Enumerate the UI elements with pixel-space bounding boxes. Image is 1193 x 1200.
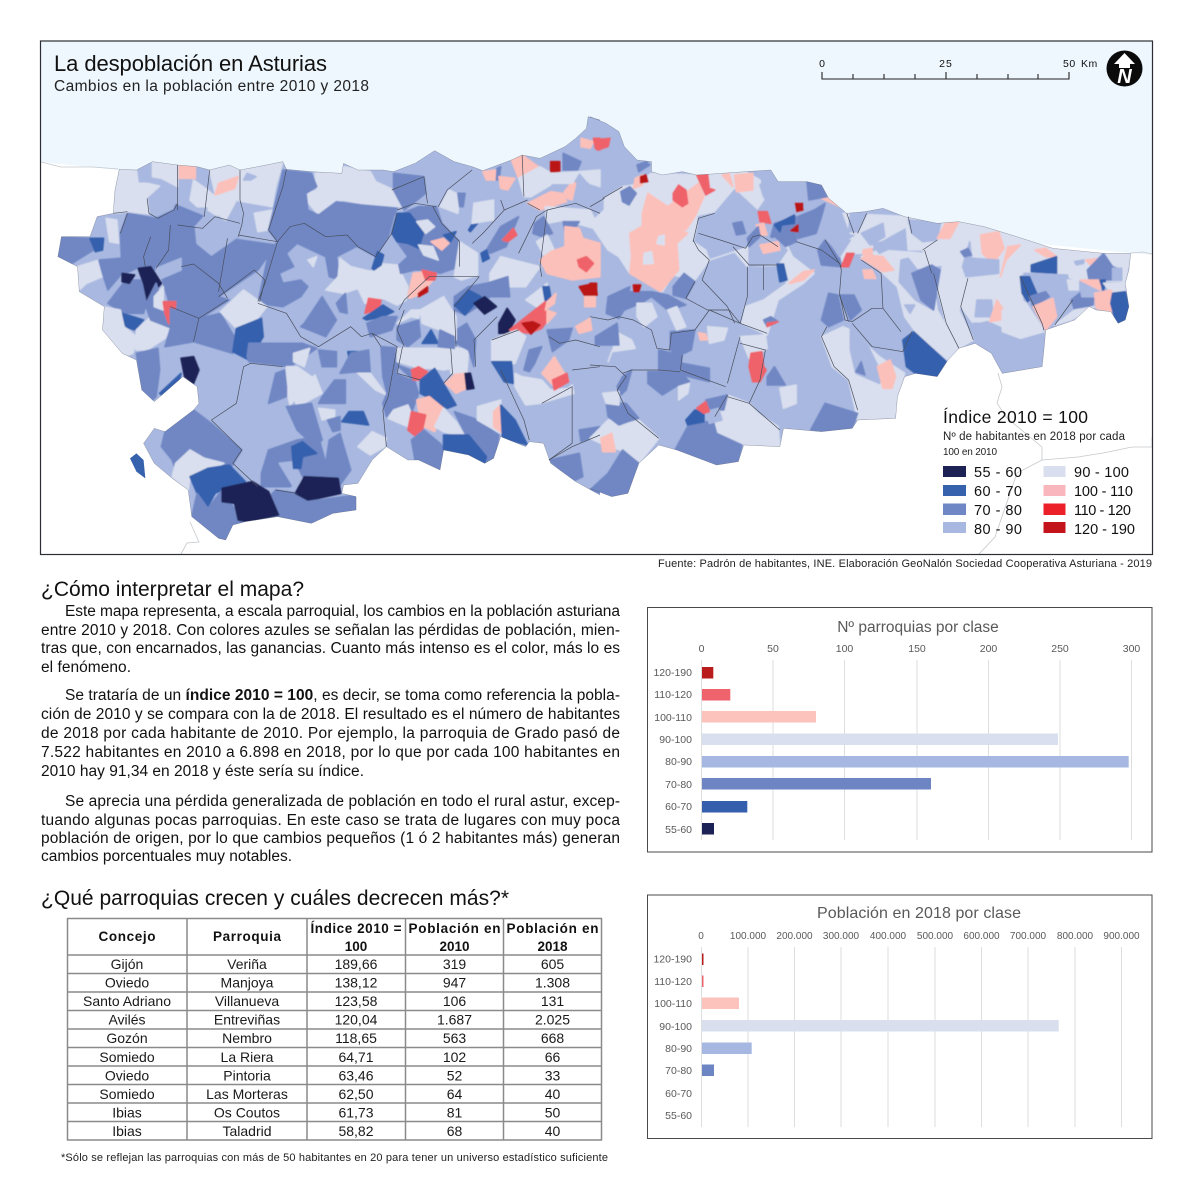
- legend labels: 90 - 100: [1074, 465, 1129, 481]
- text block: explanation: 7.522 habitantes en 2010 a 6.898 en 2018, por lo que por cada 100 habitantes en: [41, 744, 620, 761]
- axis labels: 200.000: [776, 931, 813, 942]
- subtitle: Cambios en la población entre 2010 y 2018: [54, 78, 369, 95]
- table header: Parroquia: [213, 929, 281, 944]
- legend labels: 70 - 80: [974, 503, 1022, 519]
- table rows: 319: [443, 956, 466, 972]
- heading: how to read: ¿Cómo interpretar el mapa?: [41, 578, 304, 601]
- axis labels: [698, 931, 1140, 942]
- axis labels: 300: [1123, 643, 1140, 655]
- table header: 2018: [537, 939, 568, 954]
- table rows: Taladrid: [222, 1123, 272, 1139]
- table rows: Oviedo: [105, 974, 149, 990]
- text block: explanation: el fenómeno.: [41, 659, 131, 676]
- axis labels: [699, 643, 1140, 655]
- text block: explanation: Se trataría de un índice 2010 = 100, es decir, se toma como referencia la pobla-: [65, 687, 620, 704]
- table rows: 123,58: [335, 993, 378, 1009]
- municipality borders: [58, 117, 1131, 540]
- table rows: Gozón: [106, 1030, 148, 1046]
- category labels: 120-190: [653, 667, 692, 679]
- category labels: 55-60: [665, 824, 692, 836]
- scale bar: Km: [1081, 58, 1098, 70]
- table rows: 120,04: [335, 1012, 378, 1028]
- table rows: 102: [443, 1049, 466, 1065]
- gridlines: [702, 947, 1122, 1127]
- table rows: 64,71: [338, 1049, 374, 1065]
- map panel: [40, 41, 1152, 554]
- table rows: 1.687: [437, 1012, 472, 1028]
- text block: explanation: entre 2010 y 2018. Con colores azules se señalan las pérdidas de población, mien-: [41, 622, 620, 639]
- table rows: Las Morteras: [206, 1086, 288, 1102]
- table rows: 62,50: [338, 1086, 374, 1102]
- table rows: Manjoya: [221, 974, 274, 990]
- table header: 2010: [439, 939, 470, 954]
- category labels: 90-100: [659, 734, 692, 746]
- table rows: Veriña: [227, 956, 267, 972]
- axis labels: 100.000: [730, 931, 767, 942]
- table rows: [83, 956, 570, 1139]
- category labels: 70-80: [665, 779, 692, 791]
- text block: explanation: de 2018 por cada habitante de 2010. Por ejemplo, la parroquia de Grado pasó de: [41, 725, 620, 742]
- legend labels: 55 - 60: [974, 465, 1022, 481]
- axis labels: 900.000: [1103, 931, 1140, 942]
- text block: explanation: cambios porcentuales muy notables.: [41, 848, 292, 865]
- category labels: [653, 667, 692, 836]
- table rows: 40: [545, 1086, 560, 1102]
- table rows: 138,12: [335, 974, 378, 990]
- table rows: 52: [447, 1068, 462, 1084]
- axis labels: 500.000: [917, 931, 954, 942]
- table header: [98, 921, 598, 954]
- legend: [943, 407, 1135, 538]
- table rows: Os Coutos: [214, 1104, 280, 1120]
- table rows: Santo Adriano: [83, 993, 171, 1009]
- category labels: 110-120: [654, 689, 692, 701]
- legend description: [943, 431, 1126, 458]
- table rows: 947: [443, 974, 466, 990]
- category labels: 60-70: [665, 801, 692, 813]
- bar chart: population per class: [648, 895, 1152, 1138]
- scale bar: 0: [819, 58, 825, 70]
- axis labels: 700.000: [1010, 931, 1047, 942]
- text block: explanation: Se aprecia una pérdida generalizada de población en todo el rural astur, excep-: [65, 793, 620, 810]
- table rows: 605: [541, 956, 564, 972]
- category labels: 60-70: [665, 1088, 692, 1100]
- table rows: Entreviñas: [214, 1012, 280, 1028]
- table rows: Gijón: [111, 956, 143, 972]
- table header: Índice 2010 =: [310, 921, 402, 936]
- axis labels: 600.000: [963, 931, 1000, 942]
- axis labels: 150: [908, 643, 926, 655]
- chart frame: [648, 895, 1152, 1138]
- parish choropleth: [58, 138, 1131, 540]
- category labels: [653, 954, 692, 1122]
- table rows: 68: [447, 1123, 462, 1139]
- table rows: Avilés: [108, 1012, 146, 1028]
- gridlines: [702, 660, 1132, 840]
- table rows: La Riera: [221, 1049, 274, 1065]
- table rows: 563: [443, 1030, 466, 1046]
- table header: Concejo: [98, 929, 156, 944]
- legend labels: 80 - 90: [974, 522, 1022, 538]
- category labels: 90-100: [659, 1021, 692, 1033]
- chart title: Población en 2018 por clase: [817, 905, 1021, 922]
- category labels: 100-110: [654, 998, 692, 1010]
- axis labels: 250: [1051, 643, 1069, 655]
- table rows: 189,66: [335, 956, 378, 972]
- axis labels: 300.000: [823, 931, 860, 942]
- text block: explanation: población de origen, por lo que cambios pequeños (1 ó 2 habitantes más) generan: [41, 830, 620, 847]
- category labels: 100-110: [654, 712, 692, 724]
- bars: [702, 667, 1129, 834]
- map frame: [40, 41, 1152, 554]
- text block: explanation: 2010 hay 91,34 en 2018 y éste sería su índice.: [41, 763, 364, 780]
- land outside Asturias: [41, 162, 1152, 554]
- scale bar: 50: [1063, 58, 1076, 70]
- text block: explanation: Este mapa representa, a escala parroquial, los cambios en la población asturiana: [65, 603, 620, 620]
- table rows: Nembro: [222, 1030, 272, 1046]
- table rows: 50: [545, 1104, 560, 1120]
- table rows: 668: [541, 1030, 564, 1046]
- table header: Población en: [408, 921, 500, 936]
- legend description: 100 en 2010: [943, 447, 997, 458]
- category labels: 55-60: [665, 1110, 692, 1122]
- table grid: [67, 918, 602, 1140]
- text block: explanation: ción de 2010 y se compara con la de 2018. El resultado es el número de habitantes: [41, 706, 620, 723]
- table rows: Villanueva: [215, 993, 279, 1009]
- legend title: Índice 2010 = 100: [943, 407, 1088, 427]
- table rows: 2.025: [535, 1012, 570, 1028]
- scale bar: [819, 58, 1098, 79]
- legend labels: 60 - 70: [974, 484, 1022, 500]
- title: La despoblación en Asturias: [54, 51, 327, 76]
- table rows: 1.308: [535, 974, 570, 990]
- scale bar: 25: [939, 58, 953, 70]
- table rows: 118,65: [335, 1030, 377, 1046]
- table rows: Somiedo: [99, 1086, 155, 1102]
- category labels: 80-90: [665, 1043, 692, 1055]
- heading: table: ¿Qué parroquias crecen y cuáles decrecen más?*: [41, 887, 509, 910]
- table rows: 40: [545, 1123, 560, 1139]
- table rows: 66: [545, 1049, 560, 1065]
- footnote: *Sólo se reflejan las parroquias con más de 50 habitantes en 20 para tener un universo estadístico suficiente: [61, 1152, 608, 1164]
- table rows: Oviedo: [105, 1068, 149, 1084]
- axis labels: 800.000: [1057, 931, 1094, 942]
- table rows: 63,46: [338, 1068, 374, 1084]
- neighbouring region boundaries: [41, 162, 1152, 554]
- table rows: 58,82: [338, 1123, 374, 1139]
- legend description: Nº de habitantes en 2018 por cada: [943, 431, 1126, 443]
- category labels: 110-120: [654, 976, 692, 988]
- table header: 100: [345, 939, 367, 954]
- category labels: 80-90: [665, 756, 692, 768]
- chart title: Nº parroquias por clase: [837, 619, 999, 636]
- islet exclave: [130, 453, 145, 478]
- table rows: 81: [447, 1104, 462, 1120]
- text block: explanation: tras que, con encarnados, las ganancias. Cuanto más intenso es el color, más lo es: [41, 640, 620, 657]
- axis labels: 0: [699, 643, 705, 655]
- table rows: Ibias: [112, 1104, 142, 1120]
- source note: Fuente: Padrón de habitantes, INE. Elaboración GeoNalón Sociedad Cooperativa Asturiana - 2019: [658, 558, 1152, 570]
- table header: Población en: [506, 921, 598, 936]
- table rows: Ibias: [112, 1123, 142, 1139]
- axis labels: 50: [767, 643, 779, 655]
- table rows: Somiedo: [99, 1049, 155, 1065]
- category labels: 120-190: [653, 954, 692, 966]
- icon: north arrow: [1106, 50, 1142, 88]
- category labels: 70-80: [665, 1065, 692, 1077]
- text block: explanation: [41, 603, 620, 865]
- table rows: 106: [443, 993, 466, 1009]
- legend swatches: [943, 466, 1066, 533]
- legend labels: 110 - 120: [1074, 503, 1131, 519]
- west parishes: [58, 138, 600, 540]
- text block: explanation: tuando algunas pocas parroquias. En este caso se trata de lugares con muy poca: [41, 812, 620, 829]
- axis labels: 100: [836, 643, 853, 655]
- bar chart: parishes per class: [648, 608, 1152, 852]
- data table: [67, 918, 602, 1140]
- sea background: [41, 41, 1152, 554]
- land base: parishes 80-90: [58, 117, 1131, 540]
- axis labels: 200: [980, 643, 997, 655]
- legend labels: 100 - 110: [1074, 484, 1133, 500]
- bars: [702, 954, 1059, 1076]
- table rows: 131: [541, 993, 564, 1009]
- axis labels: 400.000: [870, 931, 907, 942]
- table rows: 61,73: [338, 1104, 374, 1120]
- table rows: Pintoria: [223, 1068, 271, 1084]
- icon: north arrow: N: [1117, 66, 1132, 88]
- east parishes: [590, 138, 1131, 497]
- legend labels: 120 - 190: [1074, 522, 1135, 538]
- axis labels: 0: [698, 931, 704, 942]
- legend labels: [974, 465, 1135, 538]
- chart frame: [648, 608, 1152, 852]
- table rows: 64: [447, 1086, 462, 1102]
- table rows: 33: [545, 1068, 560, 1084]
- parish fills: [58, 138, 1131, 540]
